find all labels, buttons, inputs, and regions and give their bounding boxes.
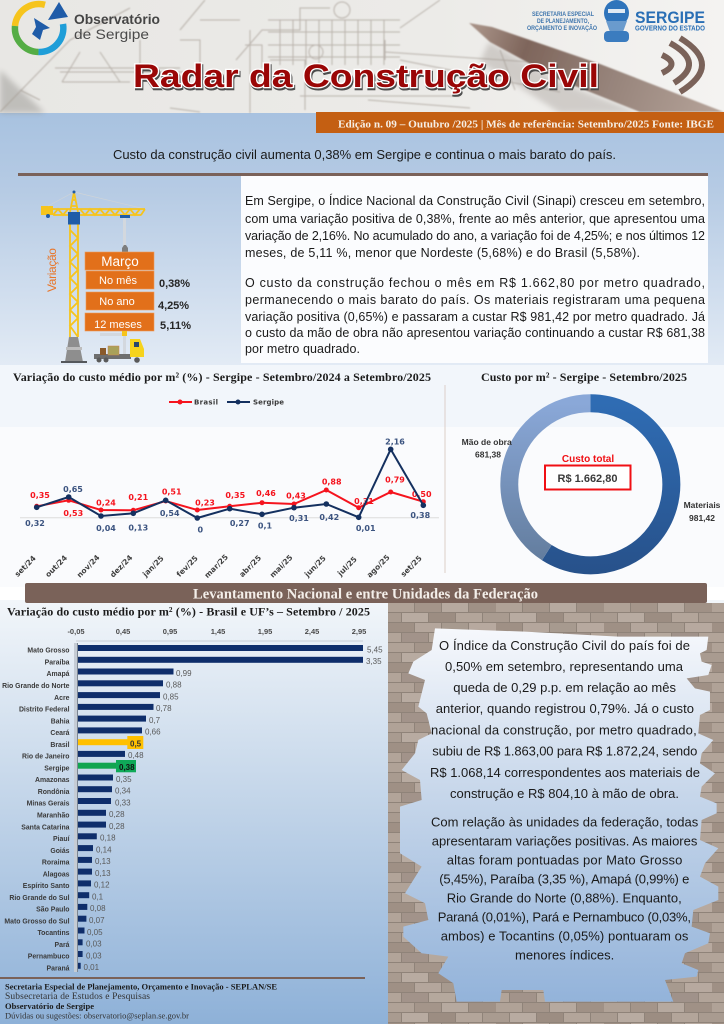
series: Sergipe: 2,16 [385, 438, 405, 446]
state labels: Tocantins [37, 930, 70, 937]
series: Sergipe: 0,1 [258, 522, 273, 530]
x axis labels: fev/25 [175, 554, 200, 579]
footer: Subsecretaria de Estudos e Pesquisas [5, 992, 150, 1002]
series: Brasil: 0,31 [354, 497, 374, 506]
text block: national index: R$ 1.068,14 correspondentes aos materiais de [430, 765, 700, 780]
text block: national index: anterior, quando registrou 0,79%. Já o custo [436, 701, 694, 716]
state labels: Sergipe [44, 765, 70, 772]
text block: Sergipe summary: variação positiva (0,65%) e passaram a custar R$ 981,42 por metro quadrado. Já [245, 310, 705, 324]
label: Mão de obra: 681,38 [475, 450, 501, 460]
state labels: Pará [55, 942, 70, 949]
axis: 1,45 [211, 627, 225, 636]
state labels: Minas Gerais [27, 801, 70, 808]
label: Materiais: 981,42 [689, 513, 715, 523]
box: 12 meses [85, 313, 191, 332]
state labels: Piauí [53, 836, 71, 843]
series: Brasil: 0,35 [225, 491, 246, 500]
box: No mês: No mês [99, 275, 137, 287]
text block: Sergipe summary: O custo da construção fechou o mês em R$ 1.662,80 por metro quadrado, [245, 276, 705, 290]
text block: national index: O Índice da Construção Civil do país foi de [439, 638, 690, 653]
callout: custo total: R$ 1.662,80 [558, 473, 617, 485]
text block: Sergipe summary: com uma variação positiva de 0,38%, frente ao mês anterior, que apresentou uma [245, 212, 705, 226]
state labels: Ceará [50, 730, 70, 737]
label: Mão de obra: Mão de obra [462, 437, 512, 447]
logo: Observatório de Sergipe: Observatório [74, 11, 160, 27]
footer [0, 977, 365, 1020]
text block: national index: nacional da construção, por metro quadrado, [431, 722, 697, 738]
donut chart: custo por m² [462, 403, 721, 565]
box: 12 meses: 5,11% [160, 320, 191, 332]
state labels: Paraíba [45, 660, 70, 666]
axis: 2,95 [352, 627, 366, 636]
value labels: 0,18 [100, 834, 116, 843]
footer: Observatório de Sergipe [5, 1001, 94, 1011]
state labels: Alagoas [43, 871, 70, 878]
heading: bar chart: Variação do custo médio por m² (%) - Brasil e UF’s – Setembro / 2025 [7, 604, 370, 618]
text block: national index: construção e R$ 804,10 à mão de obra. [450, 786, 679, 801]
heading: donut chart: Custo por m² - Sergipe - Setembro/2025 [481, 370, 687, 384]
footer: Secretaria Especial de Planejamento, Orçamento e Inovação - SEPLAN/SE [5, 982, 277, 992]
state labels: Rio Grande do Norte [2, 683, 70, 690]
icon: crane [41, 190, 145, 363]
icon: truck [94, 331, 144, 363]
label: Variação: Variação [45, 248, 59, 292]
state labels: Goiás [50, 848, 70, 855]
series: Sergipe: 0,01 [356, 524, 376, 533]
box: Março: Março [101, 254, 139, 269]
state labels: Amazonas [35, 777, 70, 784]
series: Brasil [30, 476, 432, 518]
text block: federation units: Paraná (0,01%), Pará e Pernambuco (0,03%, [438, 910, 691, 924]
state labels: Mato Grosso do Sul [4, 918, 70, 925]
panel: brick wall [388, 603, 724, 1024]
section banner [25, 583, 707, 603]
state labels: Amapá [47, 671, 70, 678]
text block: Sergipe summary: permanecendo o mais barato do país. Os materiais registraram uma pequena [245, 293, 705, 307]
axis: 0,95 [163, 627, 177, 636]
text block: Sergipe summary: por metro quadrado. [245, 342, 360, 356]
text block: federation units: ambos) e Tocantins (0,05%) pontuaram os [441, 928, 689, 944]
series: Sergipe: 0,65 [63, 485, 83, 494]
logo: Secretaria / Governo de Sergipe: SERGIPE [635, 8, 705, 27]
edition bar: Edição n. 09 – Outubro /2025 | Mês de referência: Setembro/2025 Fonte: IBGE [338, 118, 714, 130]
series: Sergipe: 0,42 [319, 513, 339, 522]
text block: Sergipe summary: Em Sergipe, o Índice Nacional da Construção Civil (Sinapi) cresceu em setembro, [245, 193, 705, 208]
state labels: Brasil [50, 742, 70, 749]
text block: national index: 0,50% em setembro, representando uma [445, 659, 684, 674]
text block: federation units: Com relação às unidades da federação, todas [431, 814, 699, 830]
logo: Observatório de Sergipe: de Sergipe [74, 26, 149, 42]
text block: federation units: menores índices. [515, 948, 614, 962]
value labels: 0,14 [96, 845, 112, 854]
x axis labels: jun/25 [302, 554, 328, 579]
x axis labels: ago/25 [365, 553, 392, 580]
x axis labels [13, 553, 424, 580]
series: Brasil: 0,46 [256, 489, 276, 498]
value labels: 0,13 [95, 857, 111, 866]
series: Sergipe [25, 438, 431, 534]
value labels: 0,13 [95, 869, 111, 878]
value labels: 0,08 [90, 904, 106, 913]
text block: federation units: (5,45%), Paraíba (3,35 %), Amapá (0,99%) e [439, 872, 689, 886]
state labels: Paraná [47, 966, 70, 972]
state labels [2, 648, 71, 972]
text block: federation units [431, 814, 699, 962]
value labels: 0,78 [156, 704, 172, 713]
callout: custo total [545, 454, 630, 490]
bars [78, 645, 363, 969]
axis: 0,45 [116, 627, 130, 636]
panel: crane infographic [41, 190, 191, 363]
value labels: 0,48 [128, 751, 144, 760]
line chart: Brasil vs Sergipe [13, 398, 439, 580]
value labels: 0,03 [86, 940, 102, 949]
state labels: Roraima [42, 860, 70, 867]
footer: Dúvidas ou sugestões: observatorio@seplan.se.gov.br [5, 1010, 189, 1020]
series: Brasil: 0,43 [286, 492, 306, 500]
state labels: Rio Grande do Sul [9, 895, 70, 902]
series: Sergipe: 0,54 [160, 509, 180, 518]
value labels: 0,01 [84, 963, 100, 972]
series: Brasil: 0,88 [322, 478, 342, 486]
icon: radar waves [662, 38, 702, 92]
box: No ano: No ano [99, 296, 135, 308]
state labels: Espírito Santo [23, 883, 70, 890]
x axis labels: mai/25 [268, 553, 295, 580]
box: Março [85, 252, 154, 270]
logo: Secretaria / Governo de Sergipe [527, 0, 705, 42]
value labels: 0,05 [87, 928, 103, 937]
x axis labels: set/25 [399, 554, 424, 579]
label: Mão de obra [462, 437, 512, 460]
series: Brasil: 0,79 [385, 476, 405, 484]
series: Sergipe: 0,31 [289, 514, 309, 523]
legend: Sergipe [253, 398, 284, 406]
value labels: 0,33 [115, 798, 131, 807]
value labels: 0,38 [119, 763, 135, 772]
text block: Sergipe summary [245, 193, 705, 356]
axis: 2,45 [305, 627, 319, 636]
series: Sergipe: 0 [198, 526, 204, 534]
callout: custo total: Custo total [562, 454, 614, 465]
value labels: 0,35 [116, 775, 132, 784]
series: Brasil: 0,35 [30, 491, 50, 500]
legend: Brasil [194, 398, 218, 406]
state labels: Bahia [51, 718, 70, 725]
state labels: São Paulo [36, 907, 70, 914]
value labels [84, 645, 383, 972]
state labels: Pernambuco [28, 954, 70, 961]
value labels: 5,45 [367, 645, 383, 654]
bar chart: UFs [2, 627, 383, 972]
x axis labels: out/24 [43, 553, 69, 579]
legend [169, 398, 284, 406]
text block: federation units: apresentaram variações positivas. As maiores [432, 834, 698, 848]
series: Brasil: 0,24 [96, 498, 116, 508]
logo: Secretaria / Governo de Sergipe: DE PLANEJAMENTO, [537, 19, 589, 25]
text block: Sergipe summary: variação de 2,16%. No acumulado do ano, a variação foi de 4,25%; e nos últimos 12 [245, 229, 705, 243]
section banner: Levantamento Nacional e entre Unidades da Federação [193, 586, 538, 602]
state labels: Santa Catarina [21, 824, 70, 831]
logo: Observatório de Sergipe [15, 2, 160, 52]
state labels: Mato Grosso [27, 648, 70, 655]
series: Sergipe: 0,13 [128, 524, 148, 532]
value labels: 0,7 [149, 716, 161, 725]
state labels: Maranhão [37, 812, 70, 820]
box: No mês: 0,38% [159, 278, 190, 290]
headline: Custo da construção civil aumenta 0,38% em Sergipe e continua o mais barato do país. [113, 147, 616, 162]
value labels: 0,5 [130, 740, 142, 748]
value labels: 0,07 [89, 916, 105, 925]
box: No ano [86, 292, 189, 312]
x axis labels: abr/25 [237, 553, 263, 579]
box: No ano: 4,25% [158, 300, 189, 312]
value labels: 0,1 [92, 892, 104, 902]
text block: Sergipe summary: meses, de 5,11 %, menor que Nordeste (5,68%) e do Brasil (5,58%). [245, 246, 640, 260]
logo: Secretaria / Governo de Sergipe: GOVERNO DO ESTADO [635, 26, 705, 32]
state labels: Rio de Janeiro [22, 754, 70, 761]
value labels: 0,03 [86, 951, 102, 960]
value labels: 0,66 [145, 728, 161, 737]
series: Brasil: 0,23 [195, 498, 215, 508]
x axis labels: nov/24 [75, 553, 102, 580]
text block: national index: queda de 0,29 p.p. em relação ao mês [453, 680, 676, 695]
value labels: 0,28 [109, 810, 125, 819]
axis: -0,05 [67, 627, 85, 636]
series: Sergipe: 0,27 [230, 519, 250, 528]
x axis labels: jan/25 [140, 554, 166, 579]
axis [67, 627, 366, 972]
value labels: 0,34 [115, 786, 131, 796]
x axis labels: mar/25 [203, 553, 230, 580]
divider: top rule [18, 173, 708, 176]
value labels: 0,12 [94, 881, 110, 890]
series: Brasil: 0,21 [128, 493, 149, 502]
x axis labels: jul/25 [335, 555, 359, 578]
x axis labels: dez/24 [108, 553, 134, 579]
value labels: 0,85 [163, 692, 179, 701]
logo: Secretaria / Governo de Sergipe: SECRETARIA ESPECIAL [532, 12, 594, 18]
divider: vertical chart separator [444, 385, 446, 573]
heading: line chart: Variação do custo médio por m² (%) - Sergipe - Setembro/2024 a Setembro/2025 [13, 370, 431, 384]
text block: national index: subiu de R$ 1.863,00 para R$ 1.872,24, sendo [432, 744, 697, 758]
state labels: Acre [54, 695, 70, 702]
text block: federation units: Rio Grande do Norte (0,88%). Enquanto, [447, 890, 682, 906]
series: Brasil: 0,51 [162, 488, 182, 496]
text block: federation units: altas foram pontuadas por Mato Grosso [447, 852, 682, 868]
box: No mês [86, 271, 190, 290]
label: Materiais: Materiais [684, 500, 721, 510]
value labels: 3,35 [366, 657, 382, 666]
text block: Sergipe summary: o custo da mão de obra não apresentou variação continuando a custar R$ 681,38 [245, 326, 705, 340]
logo: Secretaria / Governo de Sergipe: ORÇAMENTO E INOVAÇÃO [527, 25, 597, 32]
series: Sergipe: 0,04 [96, 524, 116, 533]
x axis labels: set/24 [13, 554, 38, 579]
value labels: 0,28 [109, 822, 125, 831]
value labels: 0,99 [176, 669, 192, 678]
header: blueprint photo banner [0, 0, 724, 113]
axis: 1,95 [258, 627, 272, 636]
series: Brasil: 0,53 [63, 509, 83, 518]
label: Materiais [684, 500, 721, 523]
box: 12 meses: 12 meses [94, 319, 142, 331]
panel: text background [241, 174, 708, 363]
state labels: Distrito Federal [19, 707, 70, 714]
series: Sergipe: 0,38 [410, 511, 431, 520]
series: Brasil: 0,50 [412, 490, 432, 499]
title: Radar da Construção Civil [133, 58, 599, 94]
edition bar [316, 112, 724, 133]
state labels: Rondônia [38, 789, 70, 796]
series: Sergipe: 0,32 [25, 519, 45, 528]
value labels: 0,88 [166, 681, 182, 690]
text block: national index [430, 638, 700, 801]
